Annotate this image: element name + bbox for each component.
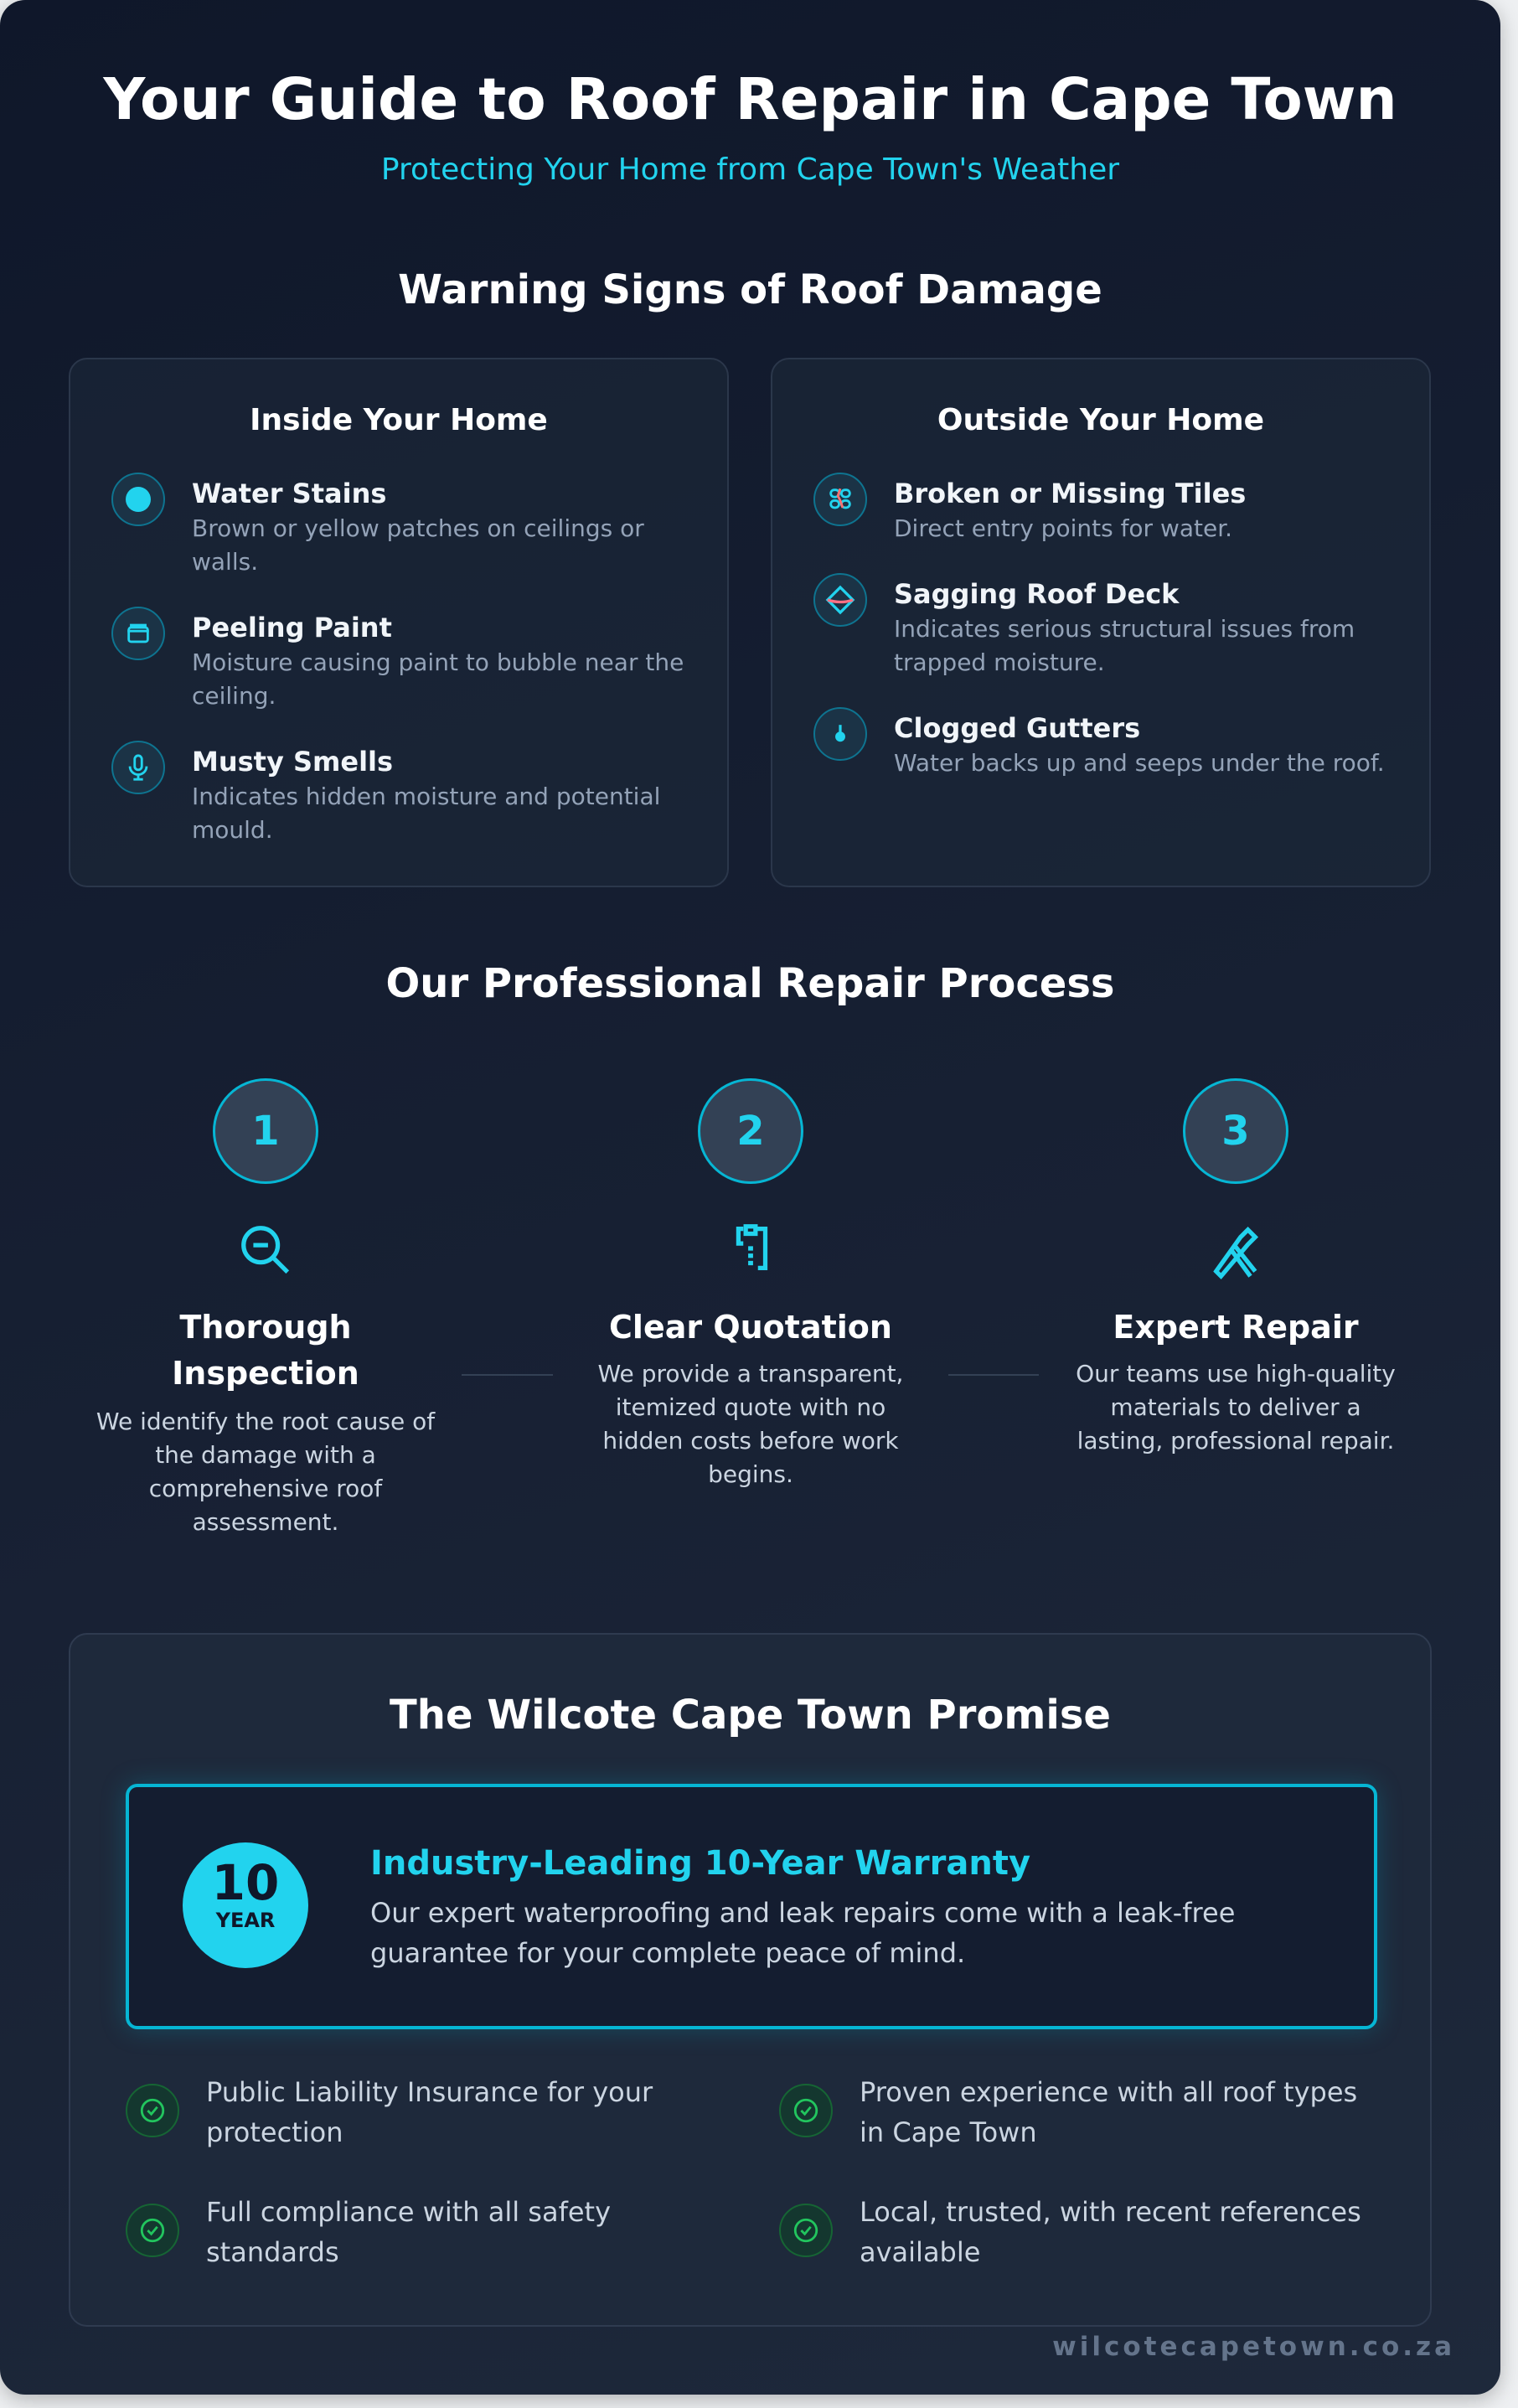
checklist item 1: Public Liability Insurance for your protection	[206, 2076, 653, 2148]
item: musty smells: Indicates hidden moisture and potential mould.	[192, 783, 660, 844]
item: broken tiles: Direct entry points for water.	[894, 514, 1232, 542]
item: peeling paint: Moisture causing paint to bubble near the ceiling.	[192, 649, 684, 710]
footer url: wilcotecapetown.co.za	[1052, 2332, 1455, 2362]
number badge 2	[698, 1078, 803, 1184]
panel heading: inside: Inside Your Home	[250, 403, 548, 437]
step title: Clear Quotation	[609, 1309, 892, 1346]
warranty text: Our expert waterproofing and leak repairs come with a leak-free guarantee for your complete peace of mind.	[370, 1897, 1235, 1969]
item: clogged gutters: Water backs up and seeps under the roof.	[894, 749, 1385, 777]
text: broken tiles: Broken or Missing Tiles	[894, 478, 1246, 509]
item: sagging deck: Indicates serious structural issues from trapped moisture.	[894, 615, 1355, 676]
icon: check	[779, 2084, 833, 2137]
icon: check	[126, 2204, 179, 2257]
step desc: We identify the root cause of the damage with a comprehensive roof assessment.	[96, 1408, 435, 1536]
item: water stains: Brown or yellow patches on ceilings or walls.	[192, 514, 644, 576]
checklist item 3: Full compliance with all safety standards	[206, 2196, 611, 2268]
heading: warning signs: Warning Signs of Roof Damage	[398, 266, 1102, 313]
panel: outside your home	[771, 358, 1431, 887]
icon: clipboard	[736, 1224, 767, 1270]
number badge 1	[213, 1078, 318, 1184]
checklist item 2: Proven experience with all roof types in Cape Town	[860, 2076, 1357, 2148]
step 1: inspection	[96, 1078, 436, 1536]
step title: Inspection	[172, 1355, 359, 1392]
step 2: quotation	[598, 1078, 903, 1488]
step desc: Our teams use high-quality materials to deliver a lasting, professional repair.	[1076, 1360, 1396, 1455]
promise heading: The Wilcote Cape Town Promise	[390, 1692, 1111, 1739]
icon: check	[126, 2084, 179, 2137]
checklist item 4: Local, trusted, with recent references available	[860, 2196, 1361, 2268]
icon: water drop	[111, 473, 165, 526]
warranty callout	[126, 1784, 1377, 2029]
text: water stains: Water Stains	[192, 478, 386, 509]
icon: 10 year badge: YEAR	[216, 1909, 275, 1932]
icon: gutter drop	[813, 707, 867, 761]
item: peeling paint	[111, 607, 684, 710]
icon: microphone	[111, 741, 165, 794]
text: musty smells: Musty Smells	[192, 746, 393, 778]
title: Your Guide to Roof Repair in Cape Town	[103, 66, 1397, 133]
item: musty smells	[111, 741, 660, 844]
icon: 10 year badge	[183, 1842, 308, 1968]
step title: Expert Repair	[1113, 1309, 1359, 1346]
item: sagging deck	[813, 573, 1355, 676]
panel heading: outside: Outside Your Home	[937, 403, 1264, 437]
icon: tools	[1213, 1227, 1258, 1279]
warranty heading: Industry-Leading 10-Year Warranty	[370, 1844, 1030, 1883]
panel: promise	[69, 1633, 1432, 2327]
panel: inside your home	[69, 358, 729, 887]
item: water stains	[111, 473, 644, 576]
icon: check	[779, 2204, 833, 2257]
item: clogged gutters	[813, 707, 1385, 777]
item: broken tiles	[813, 473, 1246, 542]
subtitle: Protecting Your Home from Cape Town's Weather	[381, 152, 1119, 187]
step title: Thorough	[179, 1309, 352, 1346]
icon: 10 year badge: 10	[212, 1854, 279, 1911]
icon: tiles	[813, 473, 867, 526]
icon: sagging diamond	[813, 573, 867, 627]
step desc: We provide a transparent, itemized quote with no hidden costs before work begins.	[598, 1360, 903, 1488]
text: peeling paint: Peeling Paint	[192, 612, 392, 643]
number badge 2: 2	[736, 1108, 765, 1155]
step title	[172, 1309, 359, 1392]
number badge 3	[1183, 1078, 1288, 1184]
icon: paint	[111, 607, 165, 660]
heading: repair process: Our Professional Repair Process	[385, 960, 1114, 1007]
step 3: repair	[1076, 1078, 1396, 1455]
text: sagging deck: Sagging Roof Deck	[894, 578, 1179, 610]
icon: magnifier	[241, 1226, 289, 1274]
number badge 3: 3	[1221, 1108, 1250, 1155]
text: clogged gutters: Clogged Gutters	[894, 712, 1140, 744]
number badge 1: 1	[251, 1108, 280, 1155]
